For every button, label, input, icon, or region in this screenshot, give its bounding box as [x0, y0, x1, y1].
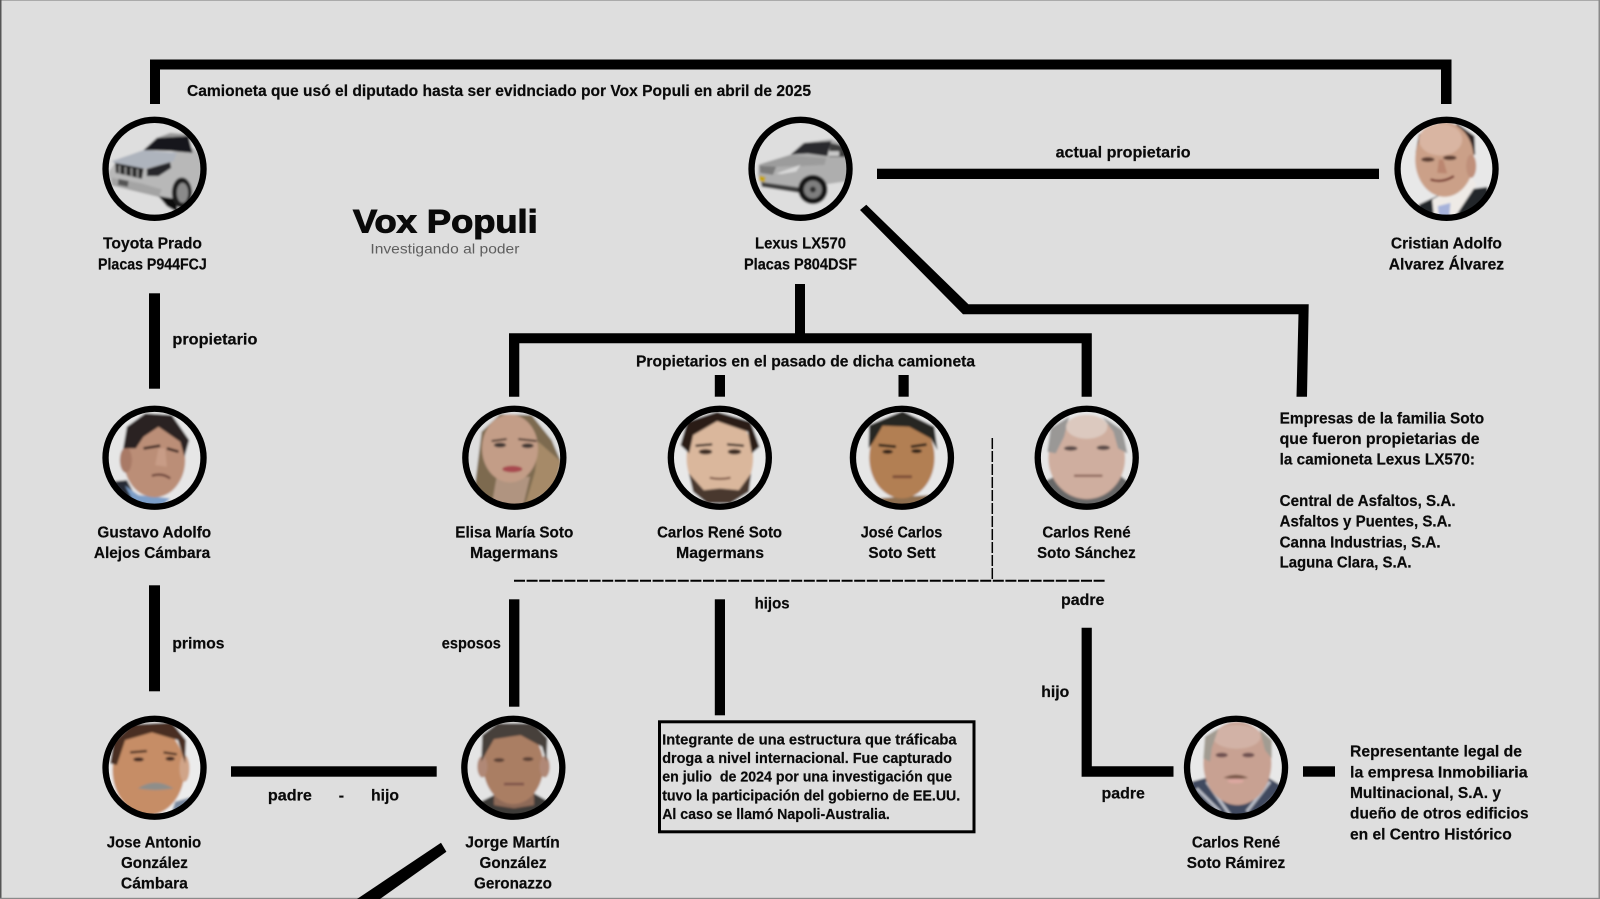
connector: Toyota to owner [149, 293, 160, 389]
callout: Napoli-Australia case: droga a nivel internacional. Fue capturado [662, 751, 952, 767]
label: Jose Antonio González Cámbara: Jose Antonio [107, 834, 201, 851]
text block: legal representative: en el Centro Histórico [1350, 826, 1512, 843]
photo: Toyota Prado [102, 116, 207, 221]
label: Carlos René Soto Magermans [657, 524, 782, 562]
text block: Soto family companies: Canna Industrias, S.A. [1280, 534, 1441, 551]
connector: Lexus to past owners bracket [509, 284, 1092, 397]
label: Toyota Prado plates [98, 236, 207, 273]
connector: diagonal from Jorge Martín [357, 843, 446, 899]
label: Jose Antonio González Cámbara: González [121, 855, 188, 872]
label: Jorge Martín González Geronazzo: Jorge Martín [465, 834, 560, 851]
text block: Soto family companies: la camioneta Lexus LX570: [1280, 452, 1475, 469]
label: Jose Antonio González Cámbara [107, 834, 201, 893]
label: Carlos René Soto Magermans: Magermans [676, 545, 764, 562]
label: Cristian Adolfo Alvarez Alvarez: Cristian Adolfo [1391, 236, 1502, 252]
label: José Carlos Soto Sett [861, 524, 942, 562]
text block: Soto family companies: Empresas de la familia Soto [1280, 410, 1484, 427]
label: Carlos René Soto Rámirez: Soto Rámirez [1187, 855, 1285, 872]
connector: actual owner line [877, 169, 1379, 179]
text block: legal representative [1350, 744, 1529, 843]
logo: Vox Populi [353, 204, 538, 256]
label: Carlos René Soto Sánchez: Carlos René [1042, 524, 1131, 541]
label: hijo: hijo [1041, 684, 1070, 701]
connector: Lexus to Soto family companies [860, 205, 1309, 397]
caption: truck used by the deputy: Camioneta que usó el diputado hasta ser evidnciado por Vox Populi en abril de 2025 [187, 83, 811, 100]
callout: Napoli-Australia case: tuvo la participación del gobierno de EE.UU. [662, 789, 960, 805]
label: Jose Antonio González Cámbara: Cámbara [121, 876, 188, 893]
callout: Napoli-Australia case [660, 722, 974, 832]
label: Cristian Adolfo Alvarez Alvarez [1389, 236, 1504, 273]
label: padre lower: padre [1102, 786, 1145, 803]
label: Carlos René Soto Sánchez: Soto Sánchez [1037, 545, 1136, 562]
dashed line: horizontal family line [514, 580, 1106, 582]
text block: legal representative: Multinacional, S.A. y [1350, 785, 1501, 802]
label: Elisa María Soto Magermans: Elisa María Soto [455, 524, 574, 541]
callout: Napoli-Australia case: Al caso se llamó Napoli-Australia. [662, 807, 890, 823]
label: padre - hijo: - [339, 788, 344, 805]
photo: Cristian Adolfo Alvarez Alvarez [1394, 116, 1499, 221]
label: primos: primos [172, 636, 224, 653]
connector: hijos to callout [715, 599, 725, 715]
callout: Napoli-Australia case: en julio de 2024 por una investigación que [662, 770, 952, 786]
label: Toyota Prado plates: Toyota Prado [103, 236, 202, 252]
label: Lexus LX570 plates: Lexus LX570 [755, 236, 846, 252]
label: Jorge Martín González Geronazzo: Geronazzo [474, 876, 552, 893]
text block: legal representative: la empresa Inmobiliaria [1350, 764, 1528, 781]
label: Elisa María Soto Magermans: Magermans [470, 545, 558, 562]
label: Lexus LX570 plates: Placas P804DSF [744, 256, 857, 273]
label: actual propietario: actual propietario [1056, 144, 1191, 161]
connector: padre - hijo [231, 766, 437, 777]
callout: Napoli-Australia case: Integrante de una estructura que tráficaba [662, 732, 958, 748]
connector: father-son elbow [1082, 628, 1174, 777]
label: Gustavo Adolfo Alejos Cámbara: Gustavo Adolfo [97, 524, 211, 541]
connector: stub to Carlos René Soto Magermans [715, 375, 725, 397]
text block: Soto family companies: Asfaltos y Puentes, S.A. [1280, 514, 1452, 530]
photo: Carlos René Soto Rámirez [1184, 716, 1288, 820]
label: propietario: propietario [172, 331, 258, 348]
label: Jorge Martín González Geronazzo [465, 834, 560, 893]
label: Lexus LX570 plates [744, 236, 857, 273]
label: José Carlos Soto Sett: Soto Sett [868, 545, 936, 562]
label: padre - hijo: hijo [371, 788, 399, 805]
text block: Soto family companies [1280, 410, 1484, 572]
label: Jorge Martín González Geronazzo: González [480, 855, 546, 872]
photo: Lexus LX570 [748, 116, 853, 221]
dashed line: vertical family line [991, 438, 993, 581]
photo: Carlos René Soto Magermans [668, 406, 772, 510]
label: padre upper: padre [1061, 592, 1104, 609]
label: José Carlos Soto Sett: José Carlos [861, 524, 942, 541]
logo: Vox Populi: Investigando al poder [370, 240, 520, 256]
label: past owners caption: Propietarios en el pasado de dicha camioneta [636, 354, 975, 371]
label: Gustavo Adolfo Alejos Cámbara [94, 524, 211, 562]
label: Carlos René Soto Magermans: Carlos René Soto [657, 524, 782, 541]
label: Cristian Adolfo Alvarez Alvarez: Alvarez Álvarez [1389, 254, 1504, 273]
label: Carlos René Soto Rámirez [1187, 834, 1285, 872]
logo: Vox Populi: Vox Populi [353, 204, 538, 240]
text block: legal representative: dueño de otros edificios [1350, 806, 1529, 823]
photo: Gustavo Adolfo Alejos Cámbara [102, 406, 207, 510]
connector: esposos [509, 599, 519, 707]
photo: Jorge Martín González Geronazzo [461, 716, 566, 820]
connector: top bracket between Toyota Prado and Cristian Adolfo [150, 60, 1452, 104]
label: Gustavo Adolfo Alejos Cámbara: Alejos Cámbara [94, 545, 210, 562]
photo: Carlos René Soto Sánchez [1034, 406, 1139, 510]
connector: stub to José Carlos Soto Sett [898, 375, 909, 397]
label: padre - hijo: padre [268, 788, 312, 805]
label: Toyota Prado plates: Placas P944FCJ [98, 256, 207, 273]
text block: Soto family companies: Central de Asfaltos, S.A. [1280, 493, 1456, 510]
label: padre - hijo [268, 788, 399, 805]
connector: short dash to description [1303, 766, 1335, 777]
label: Elisa María Soto Magermans [455, 524, 574, 562]
photo: Elisa María Soto Magermans [462, 406, 566, 510]
text block: legal representative: Representante legal de [1350, 744, 1522, 761]
label: esposos: esposos [442, 636, 501, 653]
text block: Soto family companies: que fueron propietarias de [1280, 431, 1480, 448]
photo: José Carlos Soto Sett [850, 406, 954, 510]
photo: Jose Antonio González Cámbara [102, 716, 207, 820]
label: hijos: hijos [755, 596, 790, 613]
text block: Soto family companies: Laguna Clara, S.A. [1280, 555, 1412, 572]
label: Carlos René Soto Sánchez [1037, 524, 1136, 562]
connector: primos [149, 585, 160, 691]
label: Carlos René Soto Rámirez: Carlos René [1192, 834, 1280, 851]
